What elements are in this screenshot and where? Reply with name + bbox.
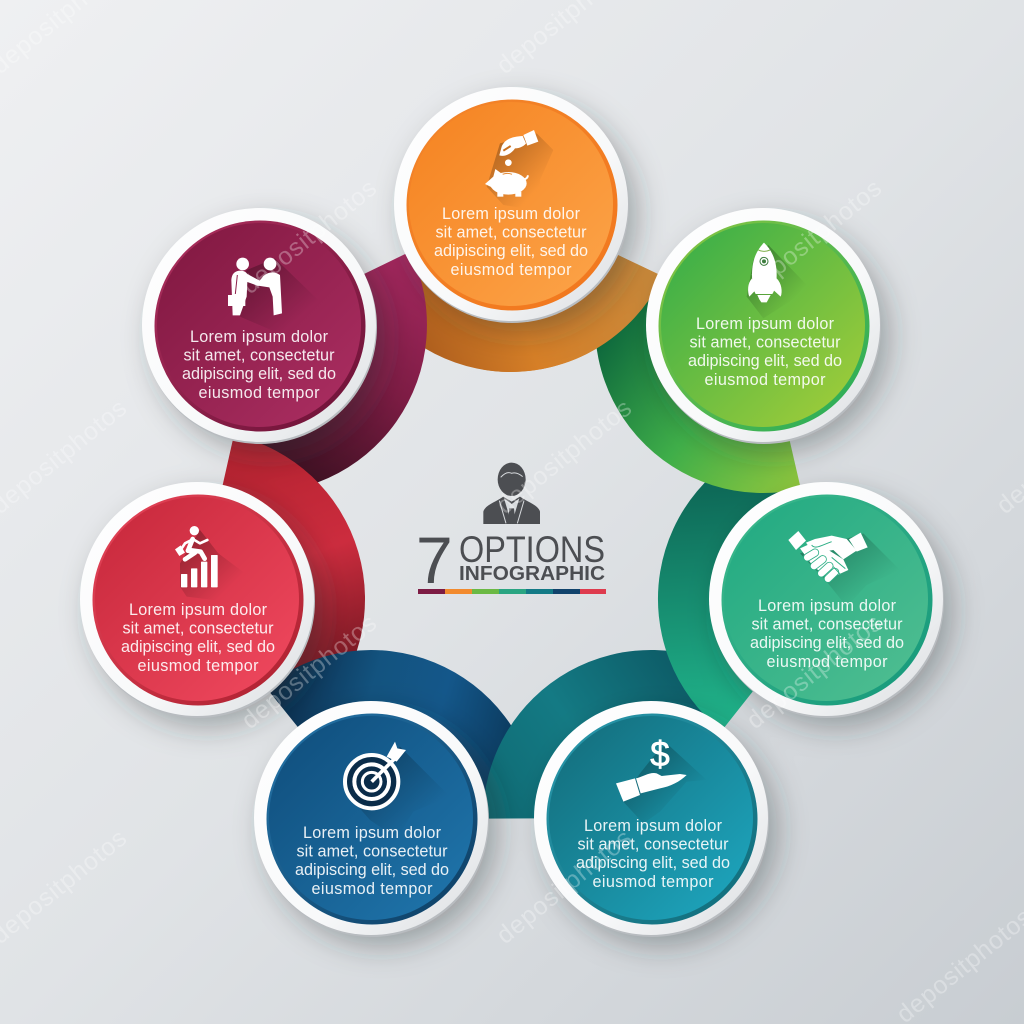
ribbon: red: [197, 435, 365, 717]
soft shadows beneath the circles: [91, 100, 952, 946]
text block: adipiscing elit, sed do: [576, 854, 730, 872]
text block: Lorem ipsum dolor: [758, 597, 897, 615]
watermarks: depositphotos: [491, 394, 637, 520]
icon: central businessman: [483, 463, 540, 524]
panel: green option: [646, 208, 881, 444]
text block: sit amet, consectetur: [752, 616, 903, 634]
text block: eiusmod tempor: [592, 873, 714, 891]
title: 7: [416, 523, 453, 597]
text block: eiusmod tempor: [766, 653, 888, 671]
text block: [121, 601, 275, 675]
watermarks: depositphotos: [491, 824, 637, 950]
text block: sit amet, consectetur: [296, 843, 448, 861]
panel: teal option: [534, 701, 769, 937]
text block: Lorem ipsum dolor: [696, 315, 835, 333]
ribbon: orange, near end: [482, 204, 663, 372]
ribbon: green: [595, 270, 801, 493]
watermarks: depositphotos: [236, 174, 382, 300]
text block: [182, 328, 336, 402]
ribbon: teal: [483, 650, 740, 819]
watermarks: depositphotos: [741, 609, 887, 735]
ribbon: orange, far end: [369, 204, 663, 372]
watermarks: depositphotos: [741, 174, 887, 300]
ribbon: maroon: [241, 252, 427, 493]
title: INFOGRAPHIC: [459, 563, 605, 585]
icon: two business people shaking hands: [228, 258, 323, 337]
text block: eiusmod tempor: [138, 657, 259, 675]
panel: red option: [80, 482, 315, 718]
text block: sit amet, consectetur: [690, 334, 841, 352]
text block: eiusmod tempor: [450, 261, 572, 279]
text block: eiusmod tempor: [312, 880, 433, 898]
text block: sit amet, consectetur: [436, 224, 587, 242]
ribbon: sea green: [658, 441, 826, 731]
icon: target with arrow: [345, 742, 450, 838]
icon: hand holding dollar: [616, 735, 707, 823]
text block: [750, 597, 904, 671]
text block: [295, 824, 449, 898]
text block: adipiscing elit, sed do: [182, 365, 336, 383]
colour legend strip: [418, 589, 606, 594]
icon: handshake: [788, 531, 900, 607]
text block: adipiscing elit, sed do: [295, 861, 449, 879]
panel: maroon option: [142, 208, 377, 444]
text block: [434, 205, 588, 279]
text block: Lorem ipsum dolor: [129, 601, 268, 619]
icon: businessman running up bar chart: [175, 526, 252, 602]
title: OPTIONS: [459, 529, 605, 570]
panel: blue option: [254, 701, 489, 937]
title: [416, 523, 605, 597]
text block: Lorem ipsum dolor: [303, 824, 442, 842]
text block: adipiscing elit, sed do: [688, 352, 842, 370]
text block: [688, 315, 842, 389]
text block: adipiscing elit, sed do: [750, 634, 904, 652]
text block: Lorem ipsum dolor: [442, 205, 581, 223]
text block: eiusmod tempor: [704, 371, 826, 389]
text block: adipiscing elit, sed do: [434, 242, 588, 260]
text block: sit amet, consectetur: [578, 836, 729, 854]
icon: hand holding dollar: $: [650, 735, 670, 774]
text block: [576, 817, 730, 891]
text block: sit amet, consectetur: [184, 347, 335, 365]
text block: eiusmod tempor: [198, 384, 320, 402]
panel: orange option: [394, 87, 629, 323]
panel: sea green option: [709, 482, 944, 718]
text block: adipiscing elit, sed do: [121, 638, 275, 656]
text block: sit amet, consectetur: [122, 620, 274, 638]
text block: Lorem ipsum dolor: [584, 817, 723, 835]
ribbons: seven overlapping arc sectors: [197, 204, 826, 819]
watermarks: depositphotos: [236, 609, 382, 735]
icon: hand dropping coin into piggy bank: [485, 130, 553, 208]
text block: Lorem ipsum dolor: [190, 328, 329, 346]
ribbon: blue: [266, 650, 538, 818]
icon: rocket: [747, 243, 810, 318]
